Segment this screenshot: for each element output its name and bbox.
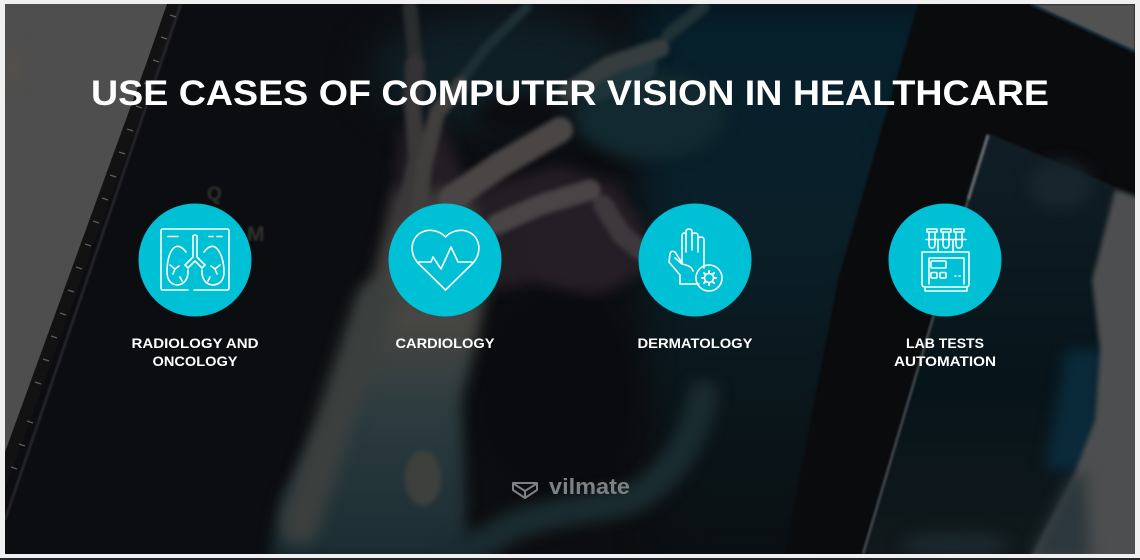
light table left area (5, 4, 167, 470)
label: cardiology: CARDIOLOGY (396, 335, 495, 351)
right light strip (1045, 350, 1105, 470)
black band and top right corner (794, 4, 966, 514)
upper hand glow (370, 10, 630, 130)
label: radiology and oncology: ONCOLOGY (152, 353, 238, 369)
use case: cardiology (388, 204, 502, 351)
faint film letters: M (247, 223, 264, 246)
faint film letters: Q (207, 184, 222, 205)
lower knuckle soft tissue (455, 395, 703, 554)
label: radiology and oncology: RADIOLOGY AND (132, 335, 258, 351)
dark gap above knuckles (480, 94, 558, 128)
icon: lungs x-ray (138, 204, 252, 316)
teal film panel (632, 4, 918, 438)
finger soft tissue (392, 128, 639, 290)
icon: heart with pulse (388, 204, 502, 316)
forearm (270, 190, 490, 560)
label: lab tests automation: AUTOMATION (894, 353, 996, 369)
title: USE CASES OF COMPUTER VISION IN HEALTHCARE (91, 74, 1049, 113)
logo: vilmate (513, 474, 630, 499)
logo wordmark: vilmate (549, 474, 630, 499)
bottom edge strip (0, 558, 1140, 560)
icon: lab machine with test tubes (888, 204, 1002, 316)
icon: hand with gear (638, 204, 752, 316)
use case: dermatology (638, 204, 753, 351)
use case: radiology and oncology (132, 204, 258, 369)
use case: lab tests automation (888, 204, 1002, 369)
icon: vilmate mark (513, 483, 537, 498)
finger bones (405, 7, 703, 250)
label: lab tests automation: LAB TESTS (906, 335, 984, 351)
dark gap between fingers (480, 295, 636, 495)
faint film letters (207, 186, 264, 242)
lower right film (862, 133, 1135, 554)
film ruler strip (5, 4, 181, 520)
label: dermatology: DERMATOLOGY (638, 335, 753, 351)
